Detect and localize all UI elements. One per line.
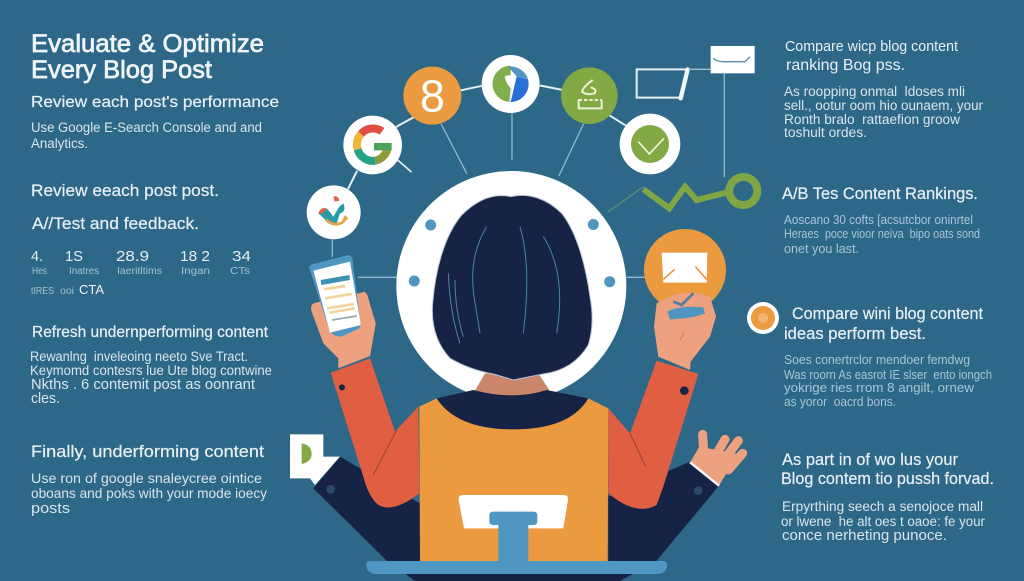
illustration: person from behind xyxy=(290,171,743,581)
icon: orange circle with 8 xyxy=(403,67,461,125)
heading: review each post: Review eeach post post. xyxy=(31,181,219,200)
metrics row: CTA xyxy=(79,282,104,297)
connector lines xyxy=(332,73,724,277)
text block: compare ideas: Soes conertrclor mendoer femdwg xyxy=(784,353,970,367)
text block: compare ideas xyxy=(784,353,992,409)
heading: compare blog content: ranking Bog pss. xyxy=(786,57,905,74)
text block: compare xyxy=(784,84,983,140)
heading: compare blog content: Compare wicp blog content xyxy=(785,38,959,55)
lower right hand xyxy=(690,434,743,486)
text block: refresh content: cles. xyxy=(31,391,60,407)
metrics row: Hes xyxy=(32,266,47,277)
metrics row: Iaeritltims xyxy=(117,266,162,277)
text block: push forward: Erpyrthing seech a senojoce mall xyxy=(782,499,983,514)
orange mail circle xyxy=(644,229,726,311)
text block: A/B test: Heraes poce vioor neiva bipo oats sond xyxy=(784,227,980,241)
metrics row: ooi xyxy=(60,286,74,297)
text block: push forward xyxy=(781,499,985,544)
heading: review performance: Review each post's performance xyxy=(31,94,279,111)
text block: search console: Analytics. xyxy=(31,136,88,151)
heading: compare blog content xyxy=(785,38,959,74)
title xyxy=(31,30,264,84)
icon: browser frame xyxy=(637,69,712,98)
metrics row xyxy=(31,248,251,297)
heading: compare ideas: ideas perform best. xyxy=(784,324,926,343)
text block: finally: posts xyxy=(31,501,70,517)
text block: refresh content: Keymomd contesrs lue Ute blog contwine xyxy=(30,363,272,378)
icon: mixed logo xyxy=(307,185,361,239)
metrics row: Inatres xyxy=(69,266,99,277)
metrics row: 28.9 xyxy=(116,248,149,265)
white page with green shape xyxy=(290,434,340,485)
halo ring xyxy=(396,171,626,401)
icon: Google G xyxy=(343,116,402,174)
vest xyxy=(419,398,608,561)
desk xyxy=(366,561,667,581)
text block: compare ideas: Was roorn As easrot IE slser ento iongch xyxy=(784,368,992,382)
collar xyxy=(437,390,588,429)
chart: green zigzag line xyxy=(643,177,757,208)
text block: compare: Ronth bralo rattaefion groow xyxy=(784,112,960,127)
icon: envelope card xyxy=(711,46,755,73)
heading: A/B test rankings: A/B Tes Content Rankings. xyxy=(782,184,978,203)
heading: compare ideas xyxy=(784,304,983,343)
text block: finally xyxy=(31,470,267,517)
heading: push forward: As part in of wo lus your xyxy=(782,450,958,469)
text block: refresh content: Rewanlng inveleoing neeto Sve Tract. xyxy=(30,349,248,364)
thumb over phone xyxy=(352,292,376,356)
text block: A/B test: onet you last. xyxy=(784,242,859,256)
panel: left column text xyxy=(30,30,279,517)
heading: compare ideas: Compare wini blog content xyxy=(792,304,983,323)
text block: refresh content xyxy=(30,349,272,407)
right sleeve xyxy=(608,361,698,509)
title: Every Blog Post xyxy=(31,56,212,84)
sleeve details xyxy=(326,384,703,495)
neck xyxy=(475,373,549,396)
text block: A/B test xyxy=(784,213,980,256)
metrics row: 4. xyxy=(31,248,43,265)
text block: compare ideas: yokrige ries rrom 8 angilt, ornew xyxy=(784,381,975,395)
right hand xyxy=(654,293,716,370)
text block: push forward: conce nerheting punoce. xyxy=(782,528,947,544)
hair xyxy=(432,195,592,380)
text block: push forward: or lwene he alt oes t oaoe: fe your xyxy=(781,514,985,529)
jacket arms xyxy=(313,457,718,581)
text block: compare: toshult ordes. xyxy=(784,125,867,140)
metrics row: 1S xyxy=(65,248,83,265)
heading: finally: Finally, underforming content xyxy=(31,442,264,461)
title: Evaluate & Optimize xyxy=(31,30,264,58)
heading: push forward xyxy=(781,450,994,488)
text block: finally: oboans and poks with your mode ioecy xyxy=(31,485,267,501)
text block: search console: Use Google E-Search Console and and xyxy=(31,120,262,135)
icon: green circle with cup xyxy=(561,67,618,124)
metrics row: CTs xyxy=(230,266,250,277)
icon: check circle xyxy=(620,114,680,174)
text block: compare ideas: as yoror oacrd bons. xyxy=(784,395,896,409)
phone xyxy=(309,255,361,337)
heading: refresh content: Refresh undernperforming content xyxy=(32,324,269,341)
text block: refresh content: Nkths . 6 contemit post as oonrant xyxy=(31,377,255,393)
heading: push forward: Blog contem tio pussh forvad. xyxy=(781,469,994,488)
metrics row: Ingan xyxy=(181,266,210,277)
text block: search console xyxy=(31,120,262,151)
chair xyxy=(459,495,568,561)
text block: compare: sell., ootur oom hio ounaem, your xyxy=(784,98,983,113)
halo dots xyxy=(409,219,615,287)
metrics row: 18 2 xyxy=(180,248,210,265)
icon: orange circle with 8: 8 xyxy=(420,71,445,122)
text block: finally: Use ron of google snaleycree ointice xyxy=(31,470,262,486)
icon: orange dot xyxy=(747,302,779,334)
text block: A/B test: Aoscano 30 cofts [acsutcbor oninrtel xyxy=(784,213,973,227)
text block: compare: As roopping onmal ldoses mli xyxy=(784,84,965,99)
left hand holding phone xyxy=(309,255,376,368)
panel: right column text xyxy=(747,38,994,544)
left sleeve xyxy=(331,358,419,507)
diagram: icon arc and connectors xyxy=(307,46,757,277)
heading: A/B test: A//Test and feedback. xyxy=(32,214,199,233)
metrics row: 34 xyxy=(232,248,251,265)
metrics row: tIRES xyxy=(31,286,54,297)
icon: white circle with pie xyxy=(482,55,540,113)
